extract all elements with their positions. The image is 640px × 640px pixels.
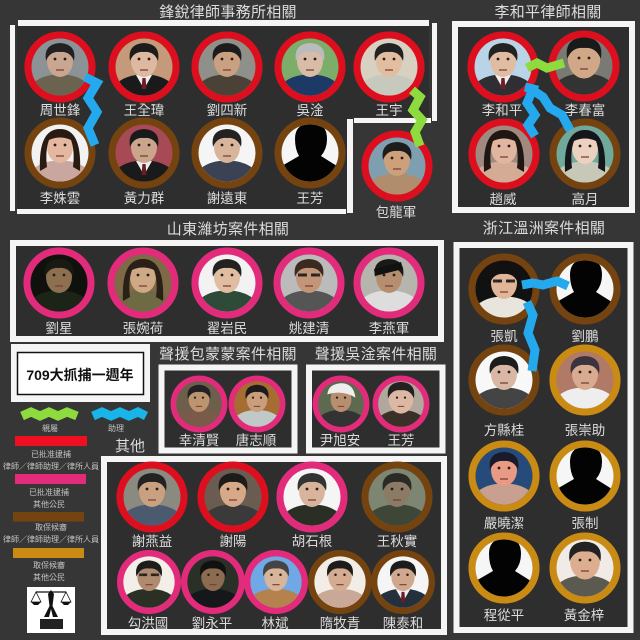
person: 劉永平: 劉永平 <box>192 616 232 631</box>
legend: brown, lawyers bail <box>3 512 99 544</box>
person: 張制 <box>553 444 617 531</box>
person: 胡石根: 胡石根 <box>292 534 333 549</box>
person: 唐志順: 唐志順 <box>236 432 277 448</box>
heading: Zhejiang Wenzhou: 浙江溫洲案件相關 <box>483 220 605 237</box>
person: 周世鋒: 周世鋒 <box>40 103 81 118</box>
person: 劉星 <box>27 251 91 336</box>
person: 王秋實 <box>365 465 429 549</box>
panel: Li Heping lawyer <box>455 24 632 210</box>
person: 黃力群 <box>112 121 176 206</box>
person: 劉四新: 劉四新 <box>207 103 247 118</box>
heading: Shandong Weifang: 山東濰坊案件相關 <box>167 221 289 238</box>
person: 黃金梓 <box>553 536 617 623</box>
person: 王秋實: 王秋實 <box>377 533 417 549</box>
person: 王芳: 王芳 <box>296 191 324 206</box>
legend: gold, citizens bail: 其他公民 <box>33 572 65 582</box>
person: 吳淦: 吳淦 <box>296 102 324 118</box>
person: 李和平 <box>471 35 535 118</box>
heading: Fengrui: 鋒銳律師事務所相關 <box>159 4 297 21</box>
person: 包龍軍 <box>365 134 429 220</box>
person: 方縣桂 <box>472 348 536 438</box>
legend <box>3 412 146 582</box>
panel: Fengrui law firm <box>10 20 437 220</box>
person: 李春富 <box>552 34 616 118</box>
legend: relative wave: 親屬 <box>42 423 58 433</box>
person: 翟岩民 <box>195 251 259 336</box>
person: 林斌 <box>247 553 305 631</box>
icon: scales of justice logo <box>27 587 75 633</box>
connector: relative, green <box>412 90 422 146</box>
legend: assistant wave: 助理 <box>108 423 124 433</box>
person: 王全瑋 <box>112 35 176 118</box>
person: 黃力群: 黃力群 <box>124 191 165 206</box>
panel: Wu Gan support case <box>309 368 442 450</box>
panel: other persons <box>104 459 444 632</box>
person: 張凱: 張凱 <box>490 329 518 344</box>
person: 姚建清: 姚建清 <box>289 321 329 336</box>
legend: red, lawyers arrested: 已批准逮捕 <box>31 449 71 459</box>
person: 謝陽 <box>201 465 265 549</box>
person: 姚建清 <box>277 251 341 336</box>
person: 謝遠東 <box>195 121 259 206</box>
person: 方縣桂: 方縣桂 <box>484 423 524 438</box>
legend: other label: 其他 <box>115 438 145 455</box>
person: 尹旭安: 尹旭安 <box>320 433 360 448</box>
heading: Bao Mengmeng support: 聲援包蒙蒙案件相關 <box>159 346 297 363</box>
person: 陳泰和: 陳泰和 <box>383 616 423 631</box>
person: 張凱 <box>472 257 536 344</box>
person: 勾洪國: 勾洪國 <box>128 616 168 631</box>
legend: red, lawyers arrested <box>3 436 99 471</box>
person: 劉星: 劉星 <box>46 321 72 336</box>
panel: Shandong Weifang case <box>13 243 441 339</box>
connector: relative, green <box>527 63 564 68</box>
person: 嚴曉潔: 嚴曉潔 <box>484 516 524 531</box>
person: 張崇助: 張崇助 <box>565 423 605 438</box>
person: 黃金梓: 黃金梓 <box>564 608 604 623</box>
legend: relative wave <box>22 412 77 433</box>
legend: pink, citizens arrested: 其他公民 <box>33 499 65 509</box>
title box: 709大抓捕一週年 <box>26 367 134 383</box>
title box <box>11 344 150 402</box>
person: 謝遠東: 謝遠東 <box>207 191 247 206</box>
person: 張婉荷 <box>111 251 175 336</box>
person: 劉鵬: 劉鵬 <box>572 329 599 344</box>
person: 周世鋒 <box>28 35 92 118</box>
person: 王宇: 王宇 <box>376 103 402 118</box>
legend: pink, citizens arrested <box>15 474 86 509</box>
person: 李姝雲 <box>28 121 92 206</box>
person: 勾洪國 <box>120 553 178 631</box>
connector: assistant to 趙威 <box>525 87 535 136</box>
person: 程從平: 程從平 <box>484 608 524 623</box>
person: 王宇 <box>357 35 421 118</box>
person: 謝燕益 <box>120 465 184 549</box>
legend: red, lawyers arrested: 律師／律師助理／律所人員 <box>3 461 99 471</box>
connector: assistant to 劉鵬 <box>522 281 568 286</box>
person: 林斌: 林斌 <box>262 616 289 631</box>
person: 胡石根 <box>280 465 344 549</box>
person: 高月 <box>553 122 617 207</box>
legend: brown, lawyers bail: 律師／律師助理／律所人員 <box>3 534 99 544</box>
person: 李春富: 李春富 <box>565 102 605 118</box>
legend: gold, citizens bail <box>13 548 84 582</box>
person: 包龍軍: 包龍軍 <box>376 204 416 220</box>
person: 程從平 <box>472 536 536 623</box>
person: 隋牧青 <box>311 553 369 631</box>
legend: brown, lawyers bail: 取保候審 <box>35 522 67 532</box>
person: 劉永平 <box>184 553 242 631</box>
person: 李燕軍: 李燕軍 <box>369 321 409 336</box>
heading: Wu Gan support: 聲援吳淦案件相關 <box>315 345 437 363</box>
panel: Zhejiang Wenzhou case <box>456 245 630 630</box>
panel: Bao Mengmeng support case <box>162 368 294 450</box>
person: 李和平: 李和平 <box>482 103 522 118</box>
person: 謝陽: 謝陽 <box>220 534 246 549</box>
person: 隋牧青: 隋牧青 <box>320 615 360 631</box>
legend: assistant wave <box>93 412 146 433</box>
connector: assistant, blue <box>85 77 97 145</box>
person: 劉鵬 <box>553 257 617 344</box>
person: 趙威 <box>472 122 536 207</box>
person: 翟岩民: 翟岩民 <box>207 321 247 336</box>
person: 李燕軍 <box>357 251 421 336</box>
person: 陳泰和 <box>374 553 432 631</box>
legend: gold, citizens bail: 取保候審 <box>33 560 65 570</box>
connector: assistant to 高月 <box>528 87 570 130</box>
person: 王全瑋: 王全瑋 <box>124 103 164 118</box>
person: 謝燕益: 謝燕益 <box>132 534 172 549</box>
connector: assistant to 方縣桂 <box>527 302 535 371</box>
person: 王芳 <box>278 121 342 206</box>
person: 幸清賢: 幸清賢 <box>179 433 220 448</box>
legend: pink, citizens arrested: 已批准逮捕 <box>29 487 69 497</box>
person: 王芳: 王芳 <box>388 433 414 448</box>
person: 張崇助 <box>553 348 617 438</box>
heading: Li Heping: 李和平律師相關 <box>494 4 602 21</box>
person: 吳淦 <box>278 35 342 118</box>
person: 李姝雲: 李姝雲 <box>40 191 80 206</box>
person: 嚴曉潔 <box>472 444 536 531</box>
person: 張婉荷: 張婉荷 <box>123 321 163 336</box>
person: 劉四新 <box>195 35 259 118</box>
person: 高月: 高月 <box>572 191 598 207</box>
person: 張制: 張制 <box>572 516 598 531</box>
person: 趙威: 趙威 <box>490 192 517 207</box>
